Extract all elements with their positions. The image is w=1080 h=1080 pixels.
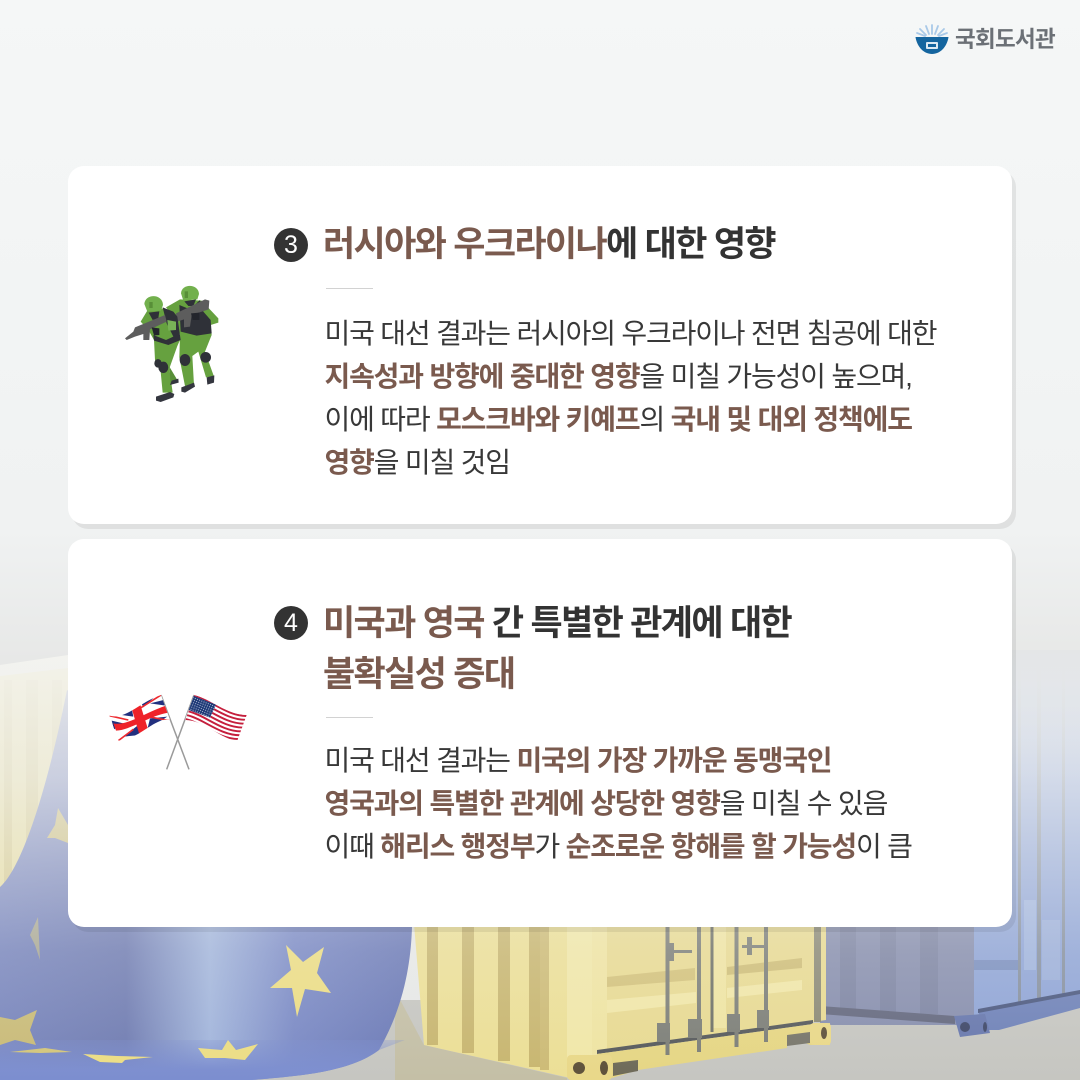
back soldier (166, 286, 218, 393)
heading 3: 러시아와 우크라이나에 대한 영향 (323, 225, 775, 264)
body text 3 (324, 318, 937, 478)
background: containers and EU flag scene (0, 564, 1080, 1080)
number badge 3 (274, 228, 308, 262)
floor (0, 1000, 1080, 1080)
wash overlay (0, 655, 1080, 1042)
icon: soldiers (125, 286, 218, 402)
divider 4 (326, 717, 373, 718)
heading 4: 불확실성 증대 (323, 655, 514, 694)
number badge 3: 3 (284, 231, 298, 259)
heading 4: 미국과 영국 간 특별한 관계에 대한 (323, 604, 791, 643)
US flag (185, 695, 246, 740)
divider 3 (326, 288, 373, 289)
body text 4: 영국과의 특별한 관계에 상당한 영향을 미칠 수 있음 (324, 788, 887, 819)
UK flag (110, 695, 170, 741)
icon: open book and rays (916, 24, 948, 54)
body text 3: 지속성과 방향에 중대한 영향을 미칠 가능성이 높으며, (324, 361, 912, 392)
body text 4 (324, 745, 912, 862)
body text 4: 이때 해리스 행정부가 순조로운 항해를 할 가능성이 큼 (324, 831, 912, 862)
number badge 4 (274, 606, 308, 640)
body text 3: 영향을 미칠 것임 (324, 447, 510, 478)
logo: National Assembly Library (916, 24, 1056, 54)
body text 3: 미국 대선 결과는 러시아의 우크라이나 전면 침공에 대한 (324, 318, 936, 349)
panel: card 4 US and UK (68, 539, 1012, 927)
EU flag (0, 690, 420, 1080)
blue container (820, 655, 1080, 1037)
logo wordmark: 국회도서관 (955, 27, 1055, 52)
body text 4: 미국 대선 결과는 미국의 가장 가까운 동맹국인 (324, 745, 831, 776)
number badge 4: 4 (284, 609, 298, 637)
heading 4 (323, 604, 792, 694)
flag poles (161, 695, 194, 769)
yellow container (395, 900, 831, 1080)
panel: card 3 Russia and Ukraine (68, 166, 1012, 524)
left cream container (0, 668, 68, 930)
icon: crossed UK and US flags (110, 694, 246, 770)
right strip top fade (1012, 650, 1080, 780)
body text 3: 이에 따라 모스크바와 키예프의 국내 및 대외 정책에도 (324, 404, 912, 435)
front soldier (125, 296, 181, 402)
